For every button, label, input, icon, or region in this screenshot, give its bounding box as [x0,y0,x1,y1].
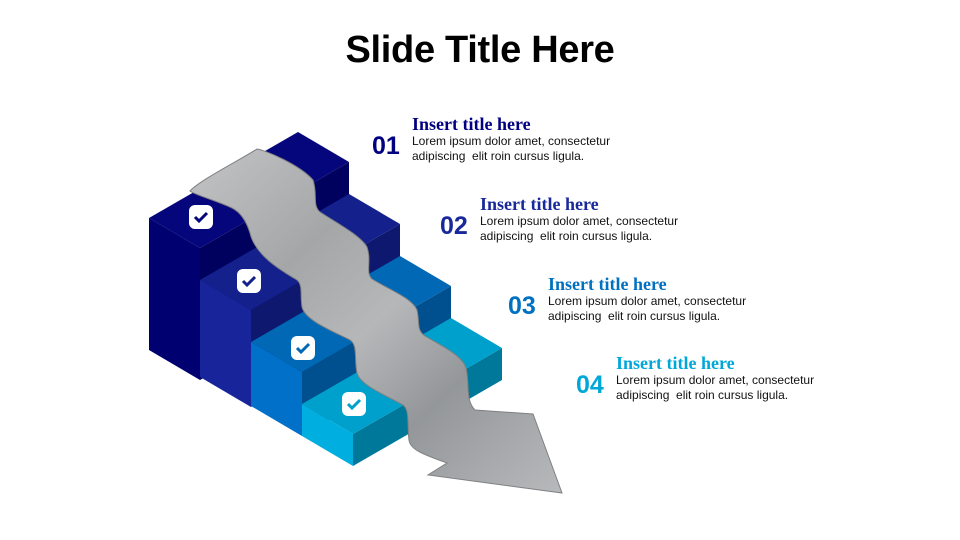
item 01 [372,114,610,163]
item 02: Insert title here [480,194,599,214]
item 04 [576,353,814,402]
icon: check 2 [237,269,261,293]
item 04: adipiscing elit roin cursus ligula. [616,388,788,402]
item 04: Insert title here [616,353,735,373]
icon: check 4 [342,392,366,416]
item 02: adipiscing elit roin cursus ligula. [480,229,652,243]
icon: check 1 [189,205,213,229]
ribbon arrow [190,149,562,493]
item 03 [508,274,746,323]
icon: check 3 [291,336,315,360]
item 04: Lorem ipsum dolor amet, consectetur [616,373,814,387]
item 03: adipiscing elit roin cursus ligula. [548,309,720,323]
item 01: 01 [372,132,400,160]
column 4 [302,318,502,466]
title: Slide Title Here [345,29,615,71]
item 01: adipiscing elit roin cursus ligula. [412,149,584,163]
item 03: Insert title here [548,274,667,294]
item 03: Lorem ipsum dolor amet, consectetur [548,294,746,308]
item 02: Lorem ipsum dolor amet, consectetur [480,214,678,228]
item 04: 04 [576,371,604,399]
item 01: Lorem ipsum dolor amet, consectetur [412,134,610,148]
item 01: Insert title here [412,114,531,134]
item 03: 03 [508,292,536,320]
item 02: 02 [440,212,468,240]
column 1 [149,132,349,380]
column 3 [251,256,451,436]
item 02 [440,194,678,243]
column 2 [200,194,400,407]
